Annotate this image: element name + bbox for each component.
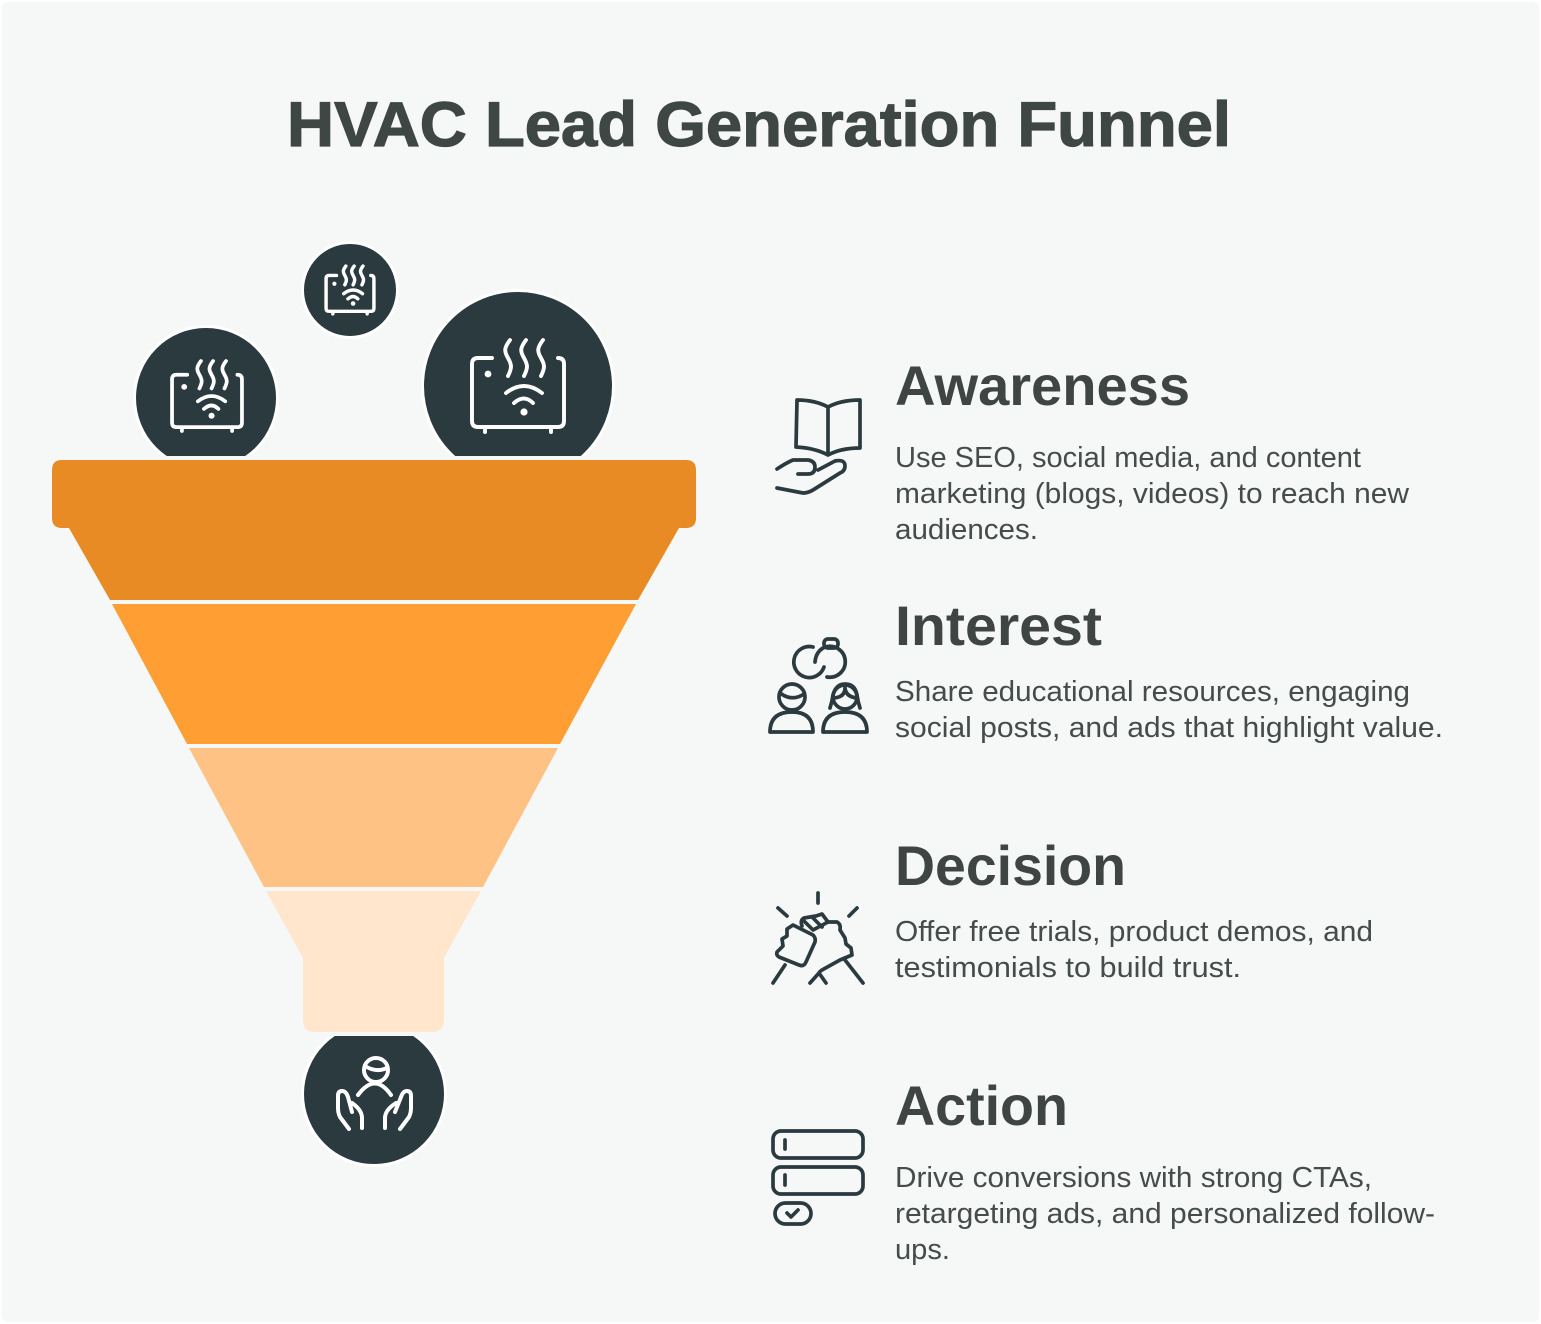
heading: Action: Action [895,1074,1068,1137]
stage: action [773,1074,1435,1266]
heading: Decision: Decision [895,834,1126,897]
title: HVAC Lead Generation Funnel [287,90,1231,160]
text: decision description: testimonials to build trust. [895,952,1241,984]
icon: customer circle [302,1022,446,1166]
text: interest description: Share educational resources, engaging [895,676,1410,708]
icon: handshake [773,893,863,983]
icon: form with checkbox [773,1131,863,1224]
text: action description [895,1162,1435,1266]
text: action description: ups. [895,1234,950,1266]
funnel band: interest [112,604,636,744]
icon: small heater circle [302,242,398,338]
funnel diagram [52,242,696,1166]
funnel band: action [266,891,481,1032]
text: action description: retargeting ads, and personalized follow- [895,1198,1435,1230]
funnel band: awareness [52,460,696,600]
icon: left heater circle [134,326,278,470]
text: awareness description [895,442,1410,546]
heading: Awareness: Awareness [895,354,1190,417]
stage: decision [773,834,1373,984]
stage: awareness [777,354,1410,546]
icon: people with rings [770,639,867,732]
text: awareness description: audiences. [895,514,1038,546]
funnel band: decision [189,748,558,887]
text: interest description: social posts, and ads that highlight value. [895,712,1443,744]
text: decision description: Offer free trials, product demos, and [895,916,1373,948]
heading: Interest: Interest [895,594,1102,657]
text: awareness description: marketing (blogs, videos) to reach new [895,478,1410,510]
text: interest description [895,676,1443,744]
text: decision description [895,916,1373,984]
text: awareness description: Use SEO, social media, and content [895,442,1361,474]
stage: interest [770,594,1443,744]
icon: large heater circle [421,289,615,456]
text: action description: Drive conversions with strong CTAs, [895,1162,1372,1194]
icon: book in hand [777,400,860,493]
